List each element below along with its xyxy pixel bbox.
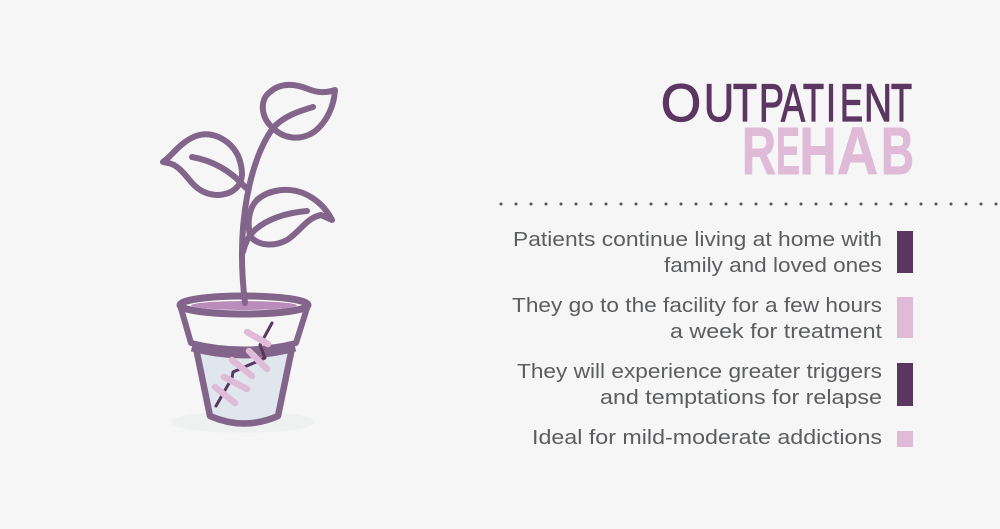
list item 1 (513, 228, 913, 277)
bar: dark (897, 363, 913, 406)
title (661, 74, 914, 189)
bar: pink (897, 297, 913, 338)
title line: outpatient: U (704, 74, 734, 133)
pot shadow (171, 411, 315, 433)
list item 2 (512, 294, 913, 343)
pot rim (180, 296, 308, 314)
illustration: potted plant with stitched pot (163, 85, 335, 433)
text: facility hours (512, 294, 882, 343)
title line: outpatient: O (661, 74, 701, 133)
list item 3 (517, 360, 913, 409)
text: ideal for: Ideal for mild-moderate addictions (532, 426, 882, 449)
title line: outpatient: I (826, 74, 836, 133)
text: facility hours: a week for treatment (670, 320, 882, 343)
title line: outpatient: A (781, 74, 805, 133)
text: facility hours: They go to the facility for a few hours (512, 294, 882, 317)
text: living at home: family and loved ones (664, 254, 882, 277)
title line: rehab: B (881, 114, 914, 189)
title line: rehab: E (776, 114, 800, 189)
title line: outpatient: P (759, 74, 784, 133)
text: triggers: They will experience greater triggers (517, 360, 882, 383)
pot band (192, 347, 295, 354)
title line: outpatient: T (891, 74, 912, 133)
top leaf (263, 85, 335, 138)
text: triggers: and temptations for relapse (600, 386, 882, 409)
list item 4 (532, 426, 913, 449)
title line: rehab: H (800, 114, 836, 189)
pot lower body (196, 348, 292, 424)
text: living at home: Patients continue living at home with (513, 228, 882, 251)
title line: outpatient: T (803, 74, 824, 133)
pot upper body (180, 305, 308, 350)
bar: pink square (897, 431, 913, 447)
title line: outpatient: E (840, 74, 863, 133)
title line: outpatient: N (864, 74, 892, 133)
stitch line (216, 323, 272, 406)
left leaf (163, 134, 246, 195)
plant stem (242, 107, 313, 303)
soil (191, 301, 297, 310)
text: living at home (513, 228, 882, 277)
right leaf (243, 190, 332, 252)
text: triggers (517, 360, 882, 409)
bar: dark (897, 231, 913, 273)
dotted divider (500, 202, 998, 206)
stitch marks (215, 332, 268, 403)
title line: rehab: R (742, 114, 776, 189)
title line: outpatient: T (733, 74, 757, 133)
title line: rehab: A (837, 114, 878, 189)
